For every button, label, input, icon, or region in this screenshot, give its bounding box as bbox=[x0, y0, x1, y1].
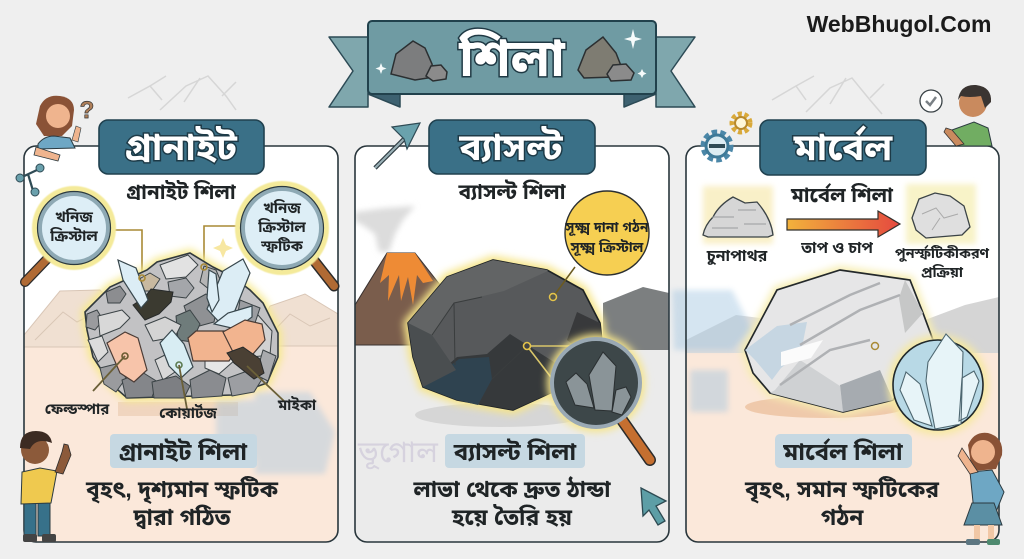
magnifier: crystals bbox=[524, 334, 650, 460]
smoke bbox=[355, 206, 415, 252]
scenery bbox=[686, 297, 999, 542]
subheading: মার্বেল শিলা bbox=[790, 183, 893, 207]
card base bbox=[355, 146, 669, 542]
right magnifier: খনিজ bbox=[263, 199, 301, 217]
right magnifier: ক্রিস্টাল bbox=[257, 218, 306, 236]
description: হয়ে তৈরি হয় bbox=[451, 503, 573, 530]
feldspar right blocks bbox=[188, 320, 265, 361]
callout: fine grain bbox=[550, 191, 649, 300]
panel: basalt bbox=[355, 120, 669, 542]
watermark blotch bbox=[216, 392, 335, 474]
heading tab: ব্যাসল্ট bbox=[458, 127, 563, 168]
mineral grains bbox=[86, 255, 276, 398]
volcano bbox=[356, 252, 440, 346]
subheading: ব্যাসল্ট শিলা bbox=[457, 180, 567, 204]
right magnifier bbox=[240, 186, 334, 286]
label quartz: কোয়ার্টজ bbox=[159, 402, 217, 422]
description: দ্বারা গঠিত bbox=[132, 503, 232, 530]
basalt rock bbox=[408, 260, 603, 410]
marble rock bbox=[745, 270, 933, 412]
right mountain bbox=[603, 287, 669, 350]
section label: ব্যাসল্ট শিলা bbox=[453, 438, 577, 466]
watermark blotch bbox=[672, 290, 752, 412]
character: girl pointing bbox=[958, 433, 1004, 545]
left magnifier: ক্রিস্টাল bbox=[49, 227, 98, 245]
description: গঠন bbox=[821, 503, 864, 530]
heading tab: মার্বেল bbox=[793, 126, 893, 168]
label recrystallization: প্রক্রিয়া bbox=[921, 264, 964, 281]
character: boy with check bbox=[920, 85, 992, 146]
label feldspar: ফেল্ডস্পার bbox=[45, 401, 110, 418]
character: girl thinking bbox=[34, 96, 81, 161]
gear icons bbox=[704, 114, 750, 159]
callout dots bbox=[122, 264, 207, 368]
callout: fine grain: সূক্ষ্ম দানা গঠন bbox=[564, 218, 649, 236]
title banner bbox=[329, 21, 695, 107]
leader lines bbox=[107, 226, 245, 278]
crystal inset bbox=[888, 334, 988, 435]
scenery bbox=[355, 206, 669, 542]
limestone rock bbox=[703, 186, 773, 244]
card outline bbox=[24, 146, 338, 542]
dark mica right bbox=[227, 347, 264, 379]
section label bbox=[445, 434, 585, 468]
description: বৃহৎ, দৃশ্যমান স্ফটিক bbox=[85, 475, 278, 504]
rock label leaders bbox=[93, 356, 285, 409]
subheading: গ্রানাইট শিলা bbox=[126, 180, 236, 204]
panel: marble bbox=[672, 114, 999, 542]
icon: question mark: ? bbox=[80, 97, 94, 124]
heading tab: গ্রানাইট bbox=[125, 127, 238, 168]
heading tab bbox=[99, 120, 264, 174]
watermark text: ভূগোল bbox=[357, 436, 439, 469]
panel: granite bbox=[24, 120, 338, 542]
granite rock bbox=[85, 253, 278, 398]
recrystallized rock bbox=[906, 184, 976, 244]
heat arrow bbox=[787, 211, 900, 237]
character: boy pointing bbox=[20, 431, 71, 542]
banner panel bbox=[368, 21, 656, 94]
quartz large crystals bbox=[207, 259, 252, 329]
cursor icon bbox=[641, 488, 666, 525]
card outline bbox=[355, 146, 669, 542]
section label bbox=[775, 434, 912, 468]
scenery bbox=[24, 290, 338, 542]
background crack doodles bbox=[128, 76, 884, 114]
section label: গ্রানাইট শিলা bbox=[119, 438, 248, 466]
card outline bbox=[686, 146, 999, 542]
icon: nodes bbox=[16, 164, 44, 196]
sparkles bbox=[376, 29, 646, 78]
heading tab bbox=[760, 120, 926, 175]
arrow icon bbox=[375, 123, 420, 168]
section label: মার্বেল শিলা bbox=[782, 438, 904, 466]
website credit: WebBhugol.Com bbox=[807, 11, 991, 37]
description: বৃহৎ, সমান স্ফটিকের bbox=[744, 475, 939, 504]
callout: fine grain: সূক্ষ্ম ক্রিস্টাল bbox=[570, 239, 644, 256]
description: লাভা থেকে দ্রুত ঠান্ডা bbox=[412, 475, 611, 502]
label heat and pressure: তাপ ও চাপ bbox=[800, 240, 873, 257]
left magnifier bbox=[25, 191, 111, 282]
sparkle bbox=[213, 238, 233, 258]
right magnifier: স্ফটিক bbox=[260, 236, 304, 255]
left magnifier: খনিজ bbox=[55, 208, 93, 226]
label limestone: চুনাপাথর bbox=[706, 248, 768, 267]
crystal left bbox=[118, 260, 148, 308]
right title rocks bbox=[578, 37, 634, 81]
banner ribbon tails bbox=[329, 37, 695, 107]
section label bbox=[110, 434, 257, 468]
feldspar crystal bbox=[107, 332, 147, 382]
left title rocks bbox=[391, 41, 447, 81]
heading tab bbox=[429, 120, 595, 174]
rock shadow bbox=[415, 404, 568, 427]
dark mica top bbox=[133, 289, 173, 320]
card base bbox=[686, 146, 999, 542]
card base bbox=[24, 146, 338, 542]
quartz center bbox=[160, 330, 193, 378]
label recrystallization: পুনর্স্ফটিকীকরণ bbox=[895, 244, 990, 262]
label mica: মাইকা bbox=[277, 396, 317, 414]
title text: শিলা bbox=[458, 28, 566, 88]
